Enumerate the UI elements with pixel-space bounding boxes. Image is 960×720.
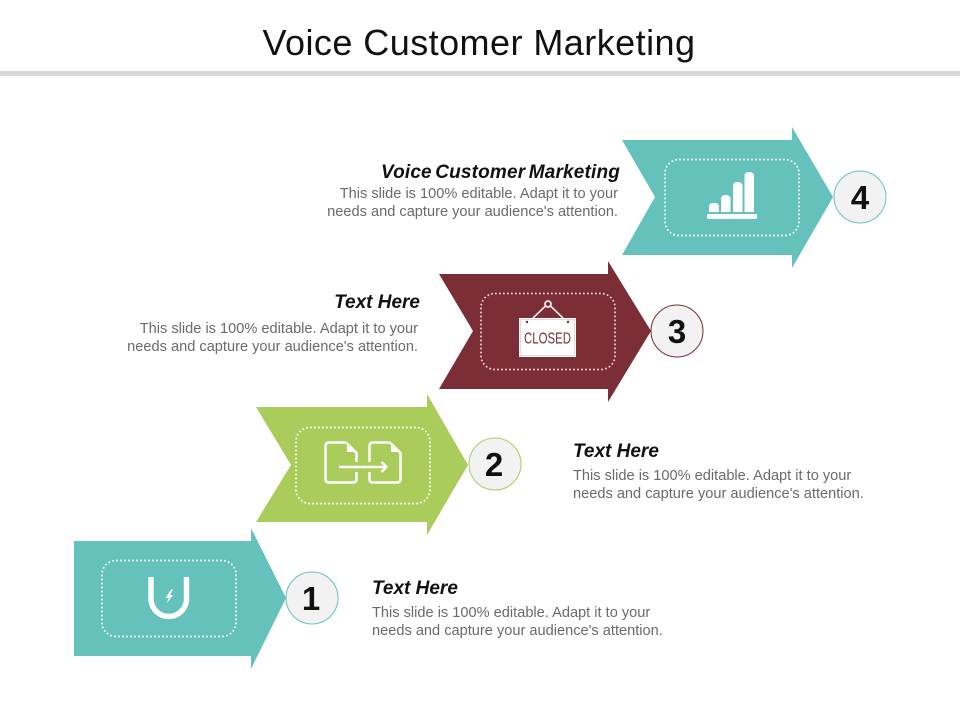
text block 1 (372, 578, 663, 639)
title: Voice Customer Marketing (262, 22, 695, 63)
arrow 4 (622, 127, 833, 268)
text block 4: Voice Customer Marketing (381, 162, 620, 183)
text block 1: Text Here (372, 578, 458, 599)
badge 3: 3 (668, 313, 686, 350)
text block 3: Text Here (334, 292, 420, 313)
text block 2: needs and capture your audience's attention. (573, 486, 864, 502)
arrow 2 (256, 394, 468, 535)
icon: magnet (151, 577, 186, 616)
text block 4: needs and capture your audience's attention. (327, 204, 618, 220)
text block 4: This slide is 100% editable. Adapt it to your (340, 186, 618, 202)
arrow 1 (74, 528, 286, 669)
icon: documents with arrow (326, 442, 400, 482)
text block 1: needs and capture your audience's attention. (372, 623, 663, 639)
text block 4 (327, 162, 620, 220)
badge 2 (469, 438, 521, 490)
arrow 3 (439, 261, 651, 402)
text block 3: This slide is 100% editable. Adapt it to your (140, 321, 418, 337)
badge 4 (834, 171, 886, 223)
icon: closed sign (519, 301, 576, 357)
badge 3 (651, 305, 703, 357)
badge 2: 2 (485, 446, 503, 483)
icon: bar chart (707, 172, 757, 219)
badge 4: 4 (851, 179, 870, 216)
text block 3: needs and capture your audience's attention. (127, 339, 418, 355)
text block 1: This slide is 100% editable. Adapt it to your (372, 605, 650, 621)
icon: closed sign: CLOSED (524, 330, 571, 348)
badge 1: 1 (302, 580, 320, 617)
text block 2: Text Here (573, 441, 659, 462)
title rule (0, 71, 960, 76)
text block 2: This slide is 100% editable. Adapt it to your (573, 468, 851, 484)
text block 3 (127, 292, 420, 355)
text block 2 (573, 441, 864, 502)
badge 1 (286, 572, 338, 624)
